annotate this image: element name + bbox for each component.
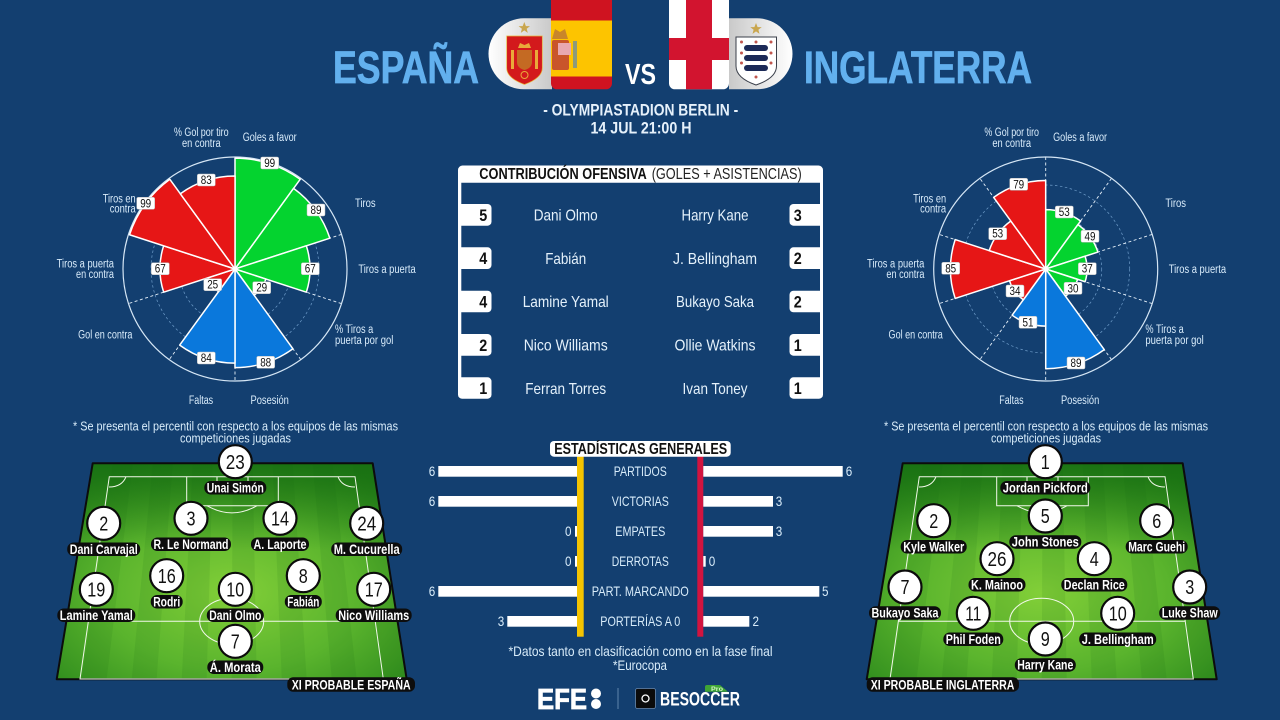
player: Shaw (1159, 570, 1220, 621)
team colour bars (577, 455, 703, 637)
pitch caption: XI probable Inglaterra: XI PROBABLE INGLATERRA (871, 677, 1015, 692)
polar chart: Inglaterra: 34 (1010, 286, 1021, 298)
player: Morata (207, 625, 263, 675)
player: Foden (943, 597, 1003, 647)
player: Rodri (150, 559, 183, 610)
player: Kane: 9 (1041, 629, 1050, 651)
player: Bellingham: J. Bellingham (1082, 632, 1154, 647)
player: Dani Olmo: Dani Olmo (209, 608, 261, 623)
player: Nico Williams: 17 (365, 579, 383, 601)
player: Fabián (285, 559, 322, 610)
player: Unai Simón (204, 445, 266, 496)
player: Morata: Á. Morata (210, 660, 261, 675)
polar chart: España: 99 (140, 198, 151, 210)
player: Declan Rice: Declan Rice (1064, 578, 1125, 592)
bar values: 2 (752, 613, 759, 629)
panel heading: (GOLES + ASISTENCIAS) (652, 166, 802, 183)
player: Guehi: Marc Guehi (1128, 540, 1185, 554)
player: Carvajal: 2 (99, 513, 108, 535)
panel: contribución ofensiva: 2 (479, 337, 487, 355)
player: Walker (901, 504, 967, 554)
panel: contribución ofensiva: J. Bellingham (673, 251, 757, 268)
player: Saka (869, 570, 941, 621)
panel: contribución ofensiva: Ferran Torres (525, 381, 606, 398)
player: Nico Williams: Nico Williams (338, 608, 409, 623)
polar chart: España: 29 (256, 283, 267, 295)
panel: contribución ofensiva: 1 (794, 380, 802, 398)
player: Mainoo: K. Mainoo (971, 578, 1023, 592)
bar values: 3 (776, 493, 782, 509)
polar chart: España: 88 (260, 357, 271, 369)
panel: contribución ofensiva: 1 (479, 380, 487, 398)
bar values: 0 (565, 523, 572, 539)
panel: contribución ofensiva: 4 (479, 250, 488, 268)
panel: contribución ofensiva: Ivan Toney (682, 381, 748, 398)
logo: BeSoccer Pro: Pro (711, 686, 723, 693)
player: Le Normand (151, 502, 231, 552)
player: Guehi: 6 (1152, 511, 1161, 533)
panel: contribución ofensiva: Bukayo Saka (676, 294, 754, 311)
player: Stones: John Stones (1012, 535, 1079, 550)
polar chart: Inglaterra: 37 (1082, 264, 1093, 276)
bar values: 3 (776, 523, 782, 539)
polar chart: España: 99 (264, 158, 275, 170)
player: Bellingham (1079, 597, 1156, 647)
panel heading: ESTADÍSTICAS GENERALES (554, 439, 727, 458)
percentile note: España (73, 418, 398, 446)
player: Mainoo: 26 (988, 549, 1006, 571)
player: Shaw: Luke Shaw (1162, 606, 1218, 621)
row labels: VICTORIAS (612, 493, 669, 509)
polar chart: Inglaterra: 79 (1013, 179, 1024, 191)
panel: contribución ofensiva: 5 (479, 207, 487, 225)
badge: England flag and crest (669, 0, 792, 89)
panel: contribución ofensiva: Fabián (545, 251, 586, 268)
percentile note: Inglaterra: * Se presenta el percentil con respecto a los equipos de las mismas (884, 418, 1208, 434)
player: Lamine Yamal: 19 (87, 579, 105, 601)
title: España: ESPAÑA (333, 42, 479, 93)
badge: Spain crest and flag (488, 0, 612, 89)
panel: contribución ofensiva: Ollie Watkins (674, 338, 756, 354)
bar values: 6 (429, 463, 435, 479)
player: Le Normand: 3 (186, 508, 196, 530)
polar chart: Inglaterra (867, 127, 1227, 407)
panel: contribución ofensiva: Harry Kane (682, 208, 749, 224)
panel: contribución ofensiva: 2 (794, 294, 802, 312)
player: Dani Olmo: 10 (226, 579, 244, 601)
player: Declan Rice (1061, 542, 1127, 592)
player: Walker: 2 (929, 511, 938, 533)
venue and date: 14 JUL 21:00 H (590, 120, 692, 138)
player: Dani Olmo (207, 573, 264, 623)
bar values: 5 (822, 583, 829, 599)
logo: BeSoccer Pro (618, 685, 740, 710)
player: Mainoo (968, 542, 1026, 592)
row labels: PORTERÍAS A 0 (600, 613, 680, 629)
title: Inglaterra: INGLATERRA (804, 42, 1032, 93)
panel: contribución ofensiva: 1 (794, 337, 802, 355)
panel: contribución ofensiva: Dani Olmo (534, 208, 598, 224)
player: Le Normand: R. Le Normand (154, 537, 228, 552)
footnote: *Eurocopa (613, 657, 667, 673)
polar chart: España: 67 (305, 264, 316, 276)
player: Rodri: Rodri (153, 594, 180, 610)
panel: contribución ofensiva: 3 (794, 207, 802, 225)
player: Walker: Kyle Walker (903, 540, 965, 554)
player: Foden: Phil Foden (946, 632, 1001, 647)
player: Lamine Yamal (57, 573, 135, 623)
venue and date: - OLYMPIASTADION BERLIN - (543, 102, 738, 120)
panel: estadísticas generales (429, 439, 852, 637)
polar chart: Inglaterra: 89 (1070, 358, 1082, 370)
pitch: España lineup (57, 445, 415, 692)
row labels: DERROTAS (612, 553, 669, 569)
player: Cucurella: M. Cucurella (334, 542, 400, 557)
player: Unai Simón: 23 (226, 452, 245, 474)
player: Lamine Yamal: Lamine Yamal (60, 608, 133, 623)
bar values: 0 (565, 553, 572, 569)
player: Pickford: 1 (1041, 452, 1050, 474)
player: Laporte: 14 (271, 508, 289, 530)
player: Laporte (251, 502, 309, 552)
player: Bellingham: 10 (1109, 603, 1127, 625)
player: Foden: 11 (965, 603, 981, 625)
player: Rodri: 16 (158, 566, 176, 588)
polar chart: España (57, 127, 416, 407)
player: Saka: Bukayo Saka (872, 606, 939, 621)
panel heading (479, 165, 802, 183)
panel: contribución ofensiva: Nico Williams (524, 338, 608, 354)
percentile note: Inglaterra: competiciones jugadas (991, 430, 1101, 446)
footnote: *Datos tanto en clasificación como en la fase final (508, 643, 772, 659)
row labels: PARTIDOS (614, 463, 667, 479)
polar chart: Inglaterra: 53 (1059, 207, 1070, 219)
player: Unai Simón: Unai Simón (207, 480, 264, 496)
player: Shaw: 3 (1185, 577, 1194, 599)
player: Fabián: 8 (299, 566, 308, 588)
percentile note: España: * Se presenta el percentil con respecto a los equipos de las mismas (73, 418, 398, 434)
polar chart: España: 25 (207, 280, 218, 292)
pitch: Inglaterra lineup (867, 445, 1220, 692)
player: Pickford: Jordan Pickford (1003, 480, 1088, 496)
bar values: 6 (429, 583, 435, 599)
player: Saka: 7 (900, 577, 910, 599)
diverging bars (438, 466, 843, 627)
panel: contribución ofensiva (458, 165, 823, 399)
row labels: EMPATES (615, 523, 665, 539)
player: Laporte: A. Laporte (254, 537, 307, 552)
polar chart: España: 84 (201, 353, 212, 365)
polar chart: España: 67 (155, 264, 166, 276)
player: Kane: Harry Kane (1017, 658, 1074, 673)
player: Fabián: Fabián (287, 594, 319, 610)
player: Carvajal (67, 507, 140, 557)
player: Kane (1015, 622, 1076, 673)
panel heading: CONTRIBUCIÓN OFENSIVA (479, 165, 647, 183)
bar values: 6 (846, 463, 852, 479)
row labels (592, 463, 689, 629)
venue and date (543, 102, 738, 138)
polar chart: España: 83 (201, 175, 212, 187)
player: Declan Rice: 4 (1090, 549, 1099, 571)
polar chart: Inglaterra: 51 (1022, 317, 1034, 329)
panel: contribución ofensiva: 2 (794, 250, 802, 268)
player: Stones (1009, 500, 1081, 550)
player: Cucurella (331, 507, 402, 557)
player: Morata: 7 (231, 631, 240, 653)
polar chart: Inglaterra: 30 (1068, 283, 1078, 295)
vs text: VS (625, 59, 656, 91)
bar values (429, 463, 852, 629)
player: Cucurella: 24 (357, 513, 376, 535)
polar chart: Inglaterra: 49 (1084, 231, 1096, 243)
player: Stones: 5 (1041, 506, 1050, 528)
logo: BeSoccer Pro: BESOCCER (660, 690, 740, 710)
percentile note: España: competiciones jugadas (180, 430, 291, 446)
polar chart: España: 89 (310, 205, 322, 217)
logo: EFE: EFE (537, 684, 587, 716)
panel: contribución ofensiva: Lamine Yamal (523, 294, 609, 311)
panel: contribución ofensiva: 4 (479, 294, 488, 312)
bar values: 6 (429, 493, 435, 509)
pitch caption: XI probable España: XI PROBABLE ESPAÑA (292, 677, 411, 692)
polar chart: Inglaterra: 53 (992, 229, 1003, 241)
footnote (508, 643, 772, 673)
player: Nico Williams (336, 573, 412, 623)
bar values: 0 (709, 553, 715, 569)
player: Pickford (1000, 445, 1090, 496)
player: Carvajal: Dani Carvajal (70, 542, 138, 557)
polar chart: Inglaterra: 85 (945, 263, 956, 275)
player: Guehi (1126, 504, 1188, 554)
row labels: PART. MARCANDO (592, 583, 689, 599)
percentile note: Inglaterra (884, 418, 1208, 446)
bar values: 3 (498, 613, 504, 629)
